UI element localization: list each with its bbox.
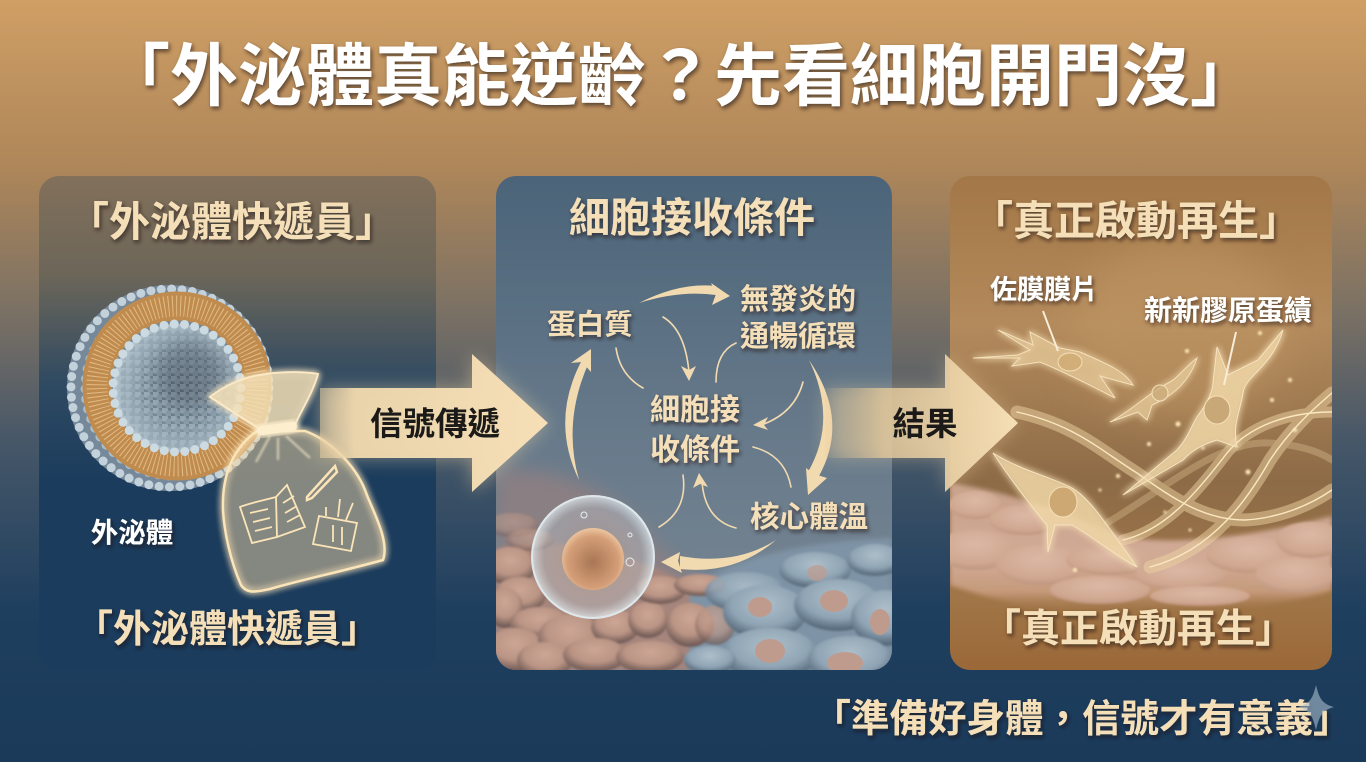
- label: protein: 蛋白質: [547, 309, 633, 341]
- closing statement: 「準備好身體，信號才有意義」: [812, 698, 1352, 741]
- panel: cell receiving conditions: [496, 176, 892, 670]
- cell nuclei: [748, 565, 890, 674]
- icon: sparkle: [1298, 685, 1334, 730]
- label: collagen: 新新膠原蛋績: [1144, 295, 1312, 326]
- tissue and fibres illustration: [935, 240, 1344, 611]
- skin cell layer: [496, 464, 892, 670]
- skin tissue: [950, 483, 1332, 611]
- panel heading: real regeneration: 「真正啟動再生」: [972, 198, 1300, 244]
- leader lines: [1043, 311, 1236, 385]
- panel heading: cell receiving conditions: 細胞接收條件: [569, 195, 815, 241]
- icon: glowing bag: [210, 372, 385, 592]
- sparkles: [1073, 331, 1297, 572]
- arrow label: signal delivery: 信號傳遞: [370, 406, 500, 442]
- icon: open book: [240, 485, 305, 543]
- panel: cell receiving conditions: 收條件: [650, 434, 740, 467]
- panel: exosome courier: [39, 176, 436, 670]
- panel: cell receiving conditions: 通暢循環: [740, 320, 856, 353]
- cycle arrows: thin: [616, 317, 803, 528]
- icon: tool pouch: [313, 499, 357, 551]
- icon: exosome vesicle: [67, 285, 273, 491]
- icon: transparent cell sphere: [532, 496, 654, 618]
- icon: pencil: [307, 466, 337, 500]
- panel: real regeneration: [935, 176, 1344, 670]
- fibroblast cells: [973, 330, 1197, 422]
- arrow label: result: 結果: [892, 406, 958, 442]
- bottom heading: exosome courier: 「外泌體快遞員」: [75, 609, 379, 651]
- label: adipose: 佐膜膜片: [990, 275, 1098, 305]
- label: centre: 細胞接: [650, 394, 740, 427]
- fibres: [1017, 393, 1332, 567]
- light rays in bag: [256, 436, 310, 462]
- panel heading: exosome courier: 「外泌體快遞員」: [68, 199, 396, 245]
- bottom heading: real regeneration: 「真正啟動再生」: [982, 608, 1294, 651]
- title: 「外泌體真能逆齡？先看細胞開門沒」: [102, 39, 1258, 115]
- arrow: signal delivery: [320, 354, 548, 492]
- label: core temperature: 核心體溫: [750, 501, 868, 534]
- arrow: result: [825, 354, 1018, 492]
- label: exosome: 外泌體: [91, 517, 173, 548]
- cycle arrows: tapered with heads: [565, 283, 832, 573]
- label: circulation: 無發炎的: [740, 283, 856, 316]
